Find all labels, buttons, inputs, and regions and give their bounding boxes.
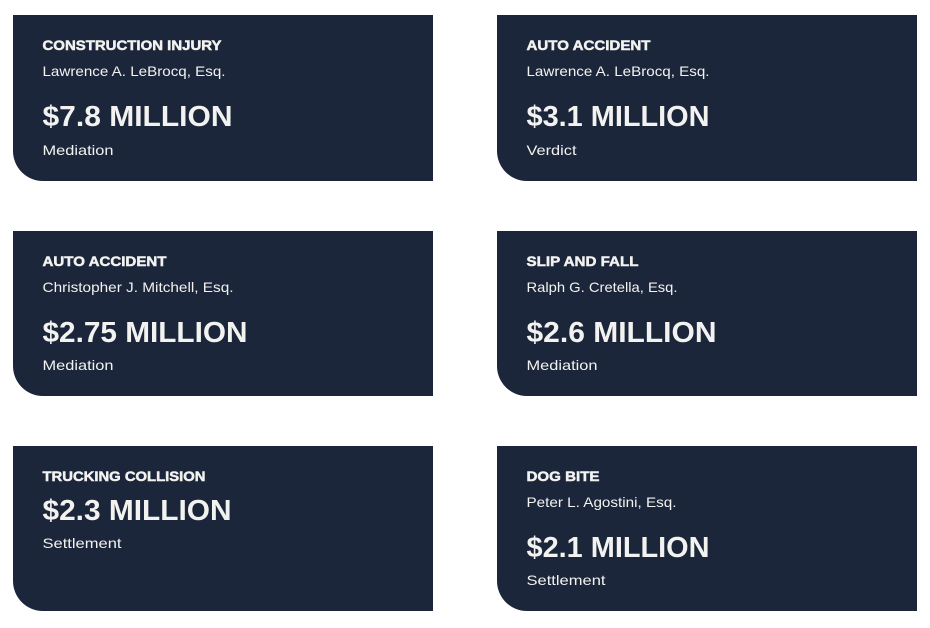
panel: dog bite: Settlement [526, 572, 606, 588]
panel: auto accident, verdict: $3.1 MILLION [526, 101, 710, 133]
panel: auto accident, verdict: AUTO ACCIDENT [526, 37, 651, 53]
panel: auto accident, verdict: Lawrence A. LeBrocq, Esq. [526, 63, 710, 79]
panel: auto accident, verdict: Verdict [526, 142, 577, 158]
panel: auto accident, mediation [13, 231, 433, 396]
panel: slip and fall [497, 231, 917, 396]
panel: trucking collision: Settlement [42, 535, 122, 551]
panel: slip and fall: SLIP AND FALL [526, 253, 639, 269]
panel: construction injury: Lawrence A. LeBrocq, Esq. [42, 63, 226, 79]
panel: construction injury: Mediation [42, 142, 114, 158]
panel: auto accident, mediation: $2.75 MILLION [42, 317, 248, 349]
panel: auto accident, mediation: Christopher J. Mitchell, Esq. [42, 279, 234, 295]
panel: trucking collision: TRUCKING COLLISION [42, 468, 206, 484]
panel: slip and fall: Mediation [526, 357, 598, 373]
panel: construction injury: $7.8 MILLION [42, 101, 232, 133]
panel: slip and fall: $2.6 MILLION [526, 317, 716, 349]
panel: auto accident, mediation: Mediation [42, 357, 114, 373]
panel: dog bite: Peter L. Agostini, Esq. [526, 494, 676, 510]
panel: trucking collision: $2.3 MILLION [42, 495, 232, 527]
panel: construction injury [13, 15, 433, 181]
panel: slip and fall: Ralph G. Cretella, Esq. [526, 279, 678, 295]
panel: construction injury: CONSTRUCTION INJURY [42, 37, 222, 53]
panel: dog bite [497, 446, 917, 611]
panel: dog bite: DOG BITE [526, 468, 600, 484]
panel: trucking collision [13, 446, 433, 611]
panel: auto accident, verdict [497, 15, 917, 181]
panel: dog bite: $2.1 MILLION [526, 532, 710, 564]
panel: auto accident, mediation: AUTO ACCIDENT [42, 253, 167, 269]
